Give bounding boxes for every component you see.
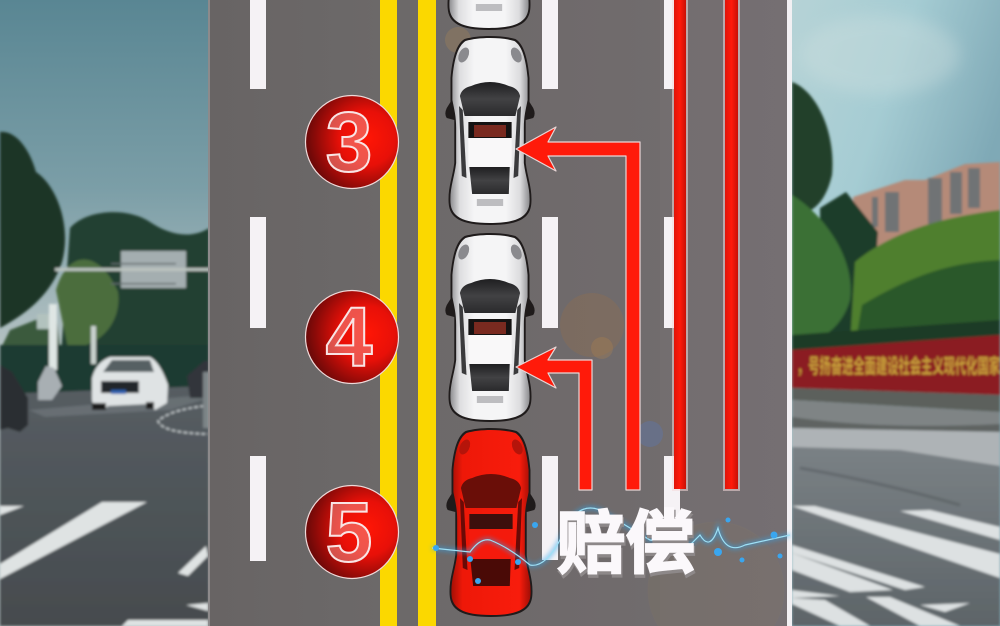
street pole [49, 304, 57, 370]
far dark car [187, 361, 209, 398]
arrow to car 3 [516, 127, 640, 490]
double yellow centre lines [380, 0, 436, 626]
road markings [0, 502, 208, 626]
car 4 [445, 233, 535, 422]
number badge 3 [306, 95, 398, 189]
number badge 4 [306, 290, 398, 384]
caption: 赔偿 [557, 487, 695, 587]
red banner [792, 335, 1000, 395]
number badge 5: 5 [326, 485, 372, 579]
trees [792, 82, 1000, 352]
left street scene [0, 0, 209, 626]
right lane dashes [542, 0, 680, 560]
caption: 赔偿 [558, 490, 696, 590]
number badge 5 [306, 485, 398, 579]
right road surface [792, 428, 1000, 626]
number badge 4: 4 [326, 290, 373, 384]
lens flares [445, 27, 784, 626]
left road surface [0, 386, 209, 626]
wall and pavement [792, 388, 1000, 412]
scooter [38, 366, 62, 400]
dark car at left [0, 365, 28, 432]
road panel [208, 0, 792, 626]
number badge 3: 3 [326, 95, 372, 189]
road markings [792, 506, 1000, 626]
red guide lines [672, 0, 740, 491]
left trees [0, 132, 209, 393]
white SUV [92, 357, 168, 410]
arrow to car 4 [516, 347, 592, 490]
blue energy wave [432, 508, 790, 584]
right street scene [792, 0, 1000, 626]
apartment buildings [853, 162, 1000, 250]
red car 5 [446, 428, 536, 617]
top white car [444, 0, 534, 30]
gantry sign [55, 251, 209, 288]
left lane dashes [250, 0, 266, 561]
car 3 [445, 36, 535, 225]
